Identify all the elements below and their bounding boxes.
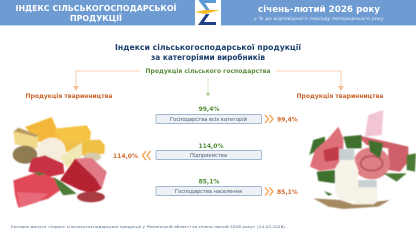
- row: households: 85,1%: [277, 189, 298, 196]
- row: enterprises: Підприємства: [190, 153, 227, 159]
- left category heading: Продукція тваринництва: [26, 94, 113, 100]
- footer source note: Експрес-випуск «Індекс сільськогосподарської продукції у Рівненській області за січень-лютий 2026 року» (24.03.2026): [11, 224, 286, 229]
- row: all categories: [156, 106, 298, 124]
- header: left title panel: ПРОДУКЦІЇ: [70, 14, 122, 23]
- row: enterprises: 114,0%: [113, 153, 138, 160]
- image: meat and milk: [309, 110, 416, 209]
- header: left title panel: [0, 0, 195, 26]
- row: households: [156, 178, 298, 196]
- image: cheese and red meat: [13, 117, 107, 208]
- main heading: Індекси сільськогосподарської продукції: [115, 43, 301, 52]
- right category heading: Продукція тваринництва: [296, 94, 384, 100]
- header: right period panel: січень-лютий 2026 року: [258, 4, 380, 15]
- main heading: [115, 43, 301, 62]
- row: households: 85,1%: [199, 178, 219, 186]
- header: right period panel: [221, 0, 416, 26]
- row: all categories: 99,4%: [199, 106, 219, 113]
- header: left title panel: ІНДЕКС СІЛЬСЬКОГОСПОДАРСЬКОЇ: [16, 4, 177, 13]
- main heading: за категоріями виробників: [151, 53, 265, 62]
- subheading: agricultural products: Продукція сільського господарства: [146, 69, 271, 75]
- row: households: Господарства населення: [175, 189, 242, 195]
- arrow: down to categories: [206, 78, 210, 97]
- row: enterprises: [113, 143, 262, 160]
- row: all categories: 99,4%: [277, 116, 298, 124]
- arrow: to right category: [276, 71, 344, 91]
- arrow: to left category: [73, 71, 140, 91]
- row: enterprises: 114,0%: [198, 143, 224, 150]
- row: all categories: Господарства всіх категорій: [170, 116, 247, 123]
- icon: statistics logo: [195, 0, 221, 26]
- header: right period panel: у % до відповідного періоду попереднього року: [253, 16, 384, 22]
